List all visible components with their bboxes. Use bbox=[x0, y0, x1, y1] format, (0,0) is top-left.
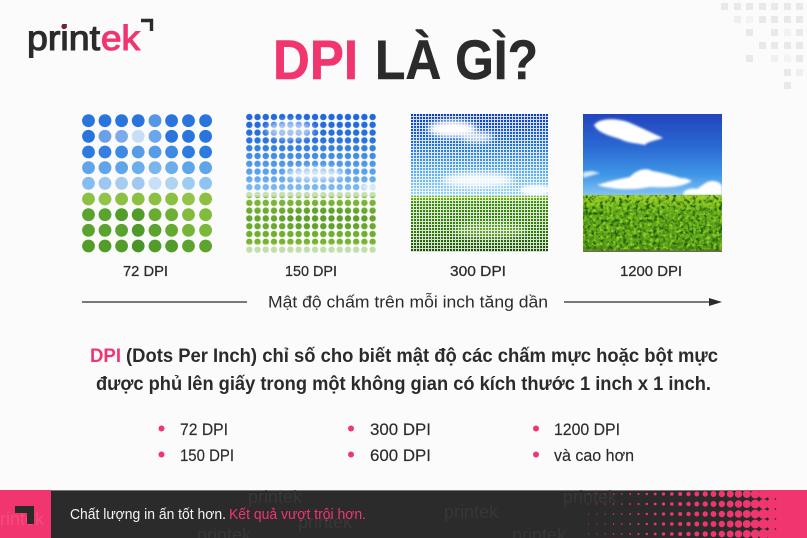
caption: 1200 DPI: 1200 DPI bbox=[620, 264, 682, 280]
footer slogan: Chất lượng in ấn tốt hơn. bbox=[70, 507, 226, 523]
definition text: được phủ lên giấy trong một không gian có kích thước 1 inch x 1 inch. bbox=[96, 374, 711, 395]
arrow: right line and head bbox=[564, 298, 722, 306]
arrow: left line bbox=[82, 301, 247, 303]
footer slogan: Kết quả vượt trội hơn. bbox=[229, 507, 366, 523]
panel: 72 DPI dots bbox=[82, 114, 212, 252]
icon: footer corner bracket bbox=[15, 506, 34, 524]
halftone dots bbox=[588, 494, 805, 538]
definition text: (Dots Per Inch) chỉ số cho biết mật độ các chấm mực hoặc bột mực bbox=[126, 346, 718, 367]
title: LÀ GÌ? bbox=[375, 28, 538, 91]
footer slogan bbox=[70, 507, 366, 523]
bullet list: DPI levels bbox=[158, 421, 634, 465]
title bbox=[273, 28, 538, 91]
bullet list: DPI levels: và cao hơn bbox=[554, 447, 634, 465]
footer bar: printek bbox=[248, 487, 303, 507]
caption: 150 DPI: 150 DPI bbox=[285, 264, 337, 280]
definition text bbox=[90, 346, 718, 395]
logo: printek: ek bbox=[101, 19, 141, 58]
panel: 150 DPI dots bbox=[245, 113, 379, 254]
arrow label: Mật độ chấm trên mỗi inch tăng dần bbox=[268, 292, 548, 312]
bullet list: DPI levels: 150 DPI bbox=[180, 447, 234, 465]
caption: 300 DPI: 300 DPI bbox=[450, 264, 506, 280]
title: DPI bbox=[273, 28, 358, 91]
bullet list: DPI levels: 1200 DPI bbox=[554, 421, 620, 439]
logo: printek: print bbox=[27, 19, 100, 58]
bullet list: DPI levels: 300 DPI bbox=[370, 421, 431, 439]
footer bar: printek bbox=[444, 502, 499, 522]
panel: 1200 DPI photo bbox=[583, 114, 722, 252]
panel: 300 DPI dots bbox=[411, 114, 552, 252]
footer bar: printek bbox=[563, 487, 618, 507]
footer bar bbox=[0, 487, 807, 538]
bullet list: DPI levels: 72 DPI bbox=[180, 421, 228, 439]
definition text: DPI bbox=[90, 346, 121, 367]
logo: printek bbox=[27, 19, 152, 58]
decorative grey squares, top right bbox=[721, 3, 803, 89]
caption: 72 DPI: 72 DPI bbox=[123, 264, 168, 280]
bullet list: DPI levels: 600 DPI bbox=[370, 447, 431, 465]
footer bar: printek bbox=[298, 512, 353, 532]
